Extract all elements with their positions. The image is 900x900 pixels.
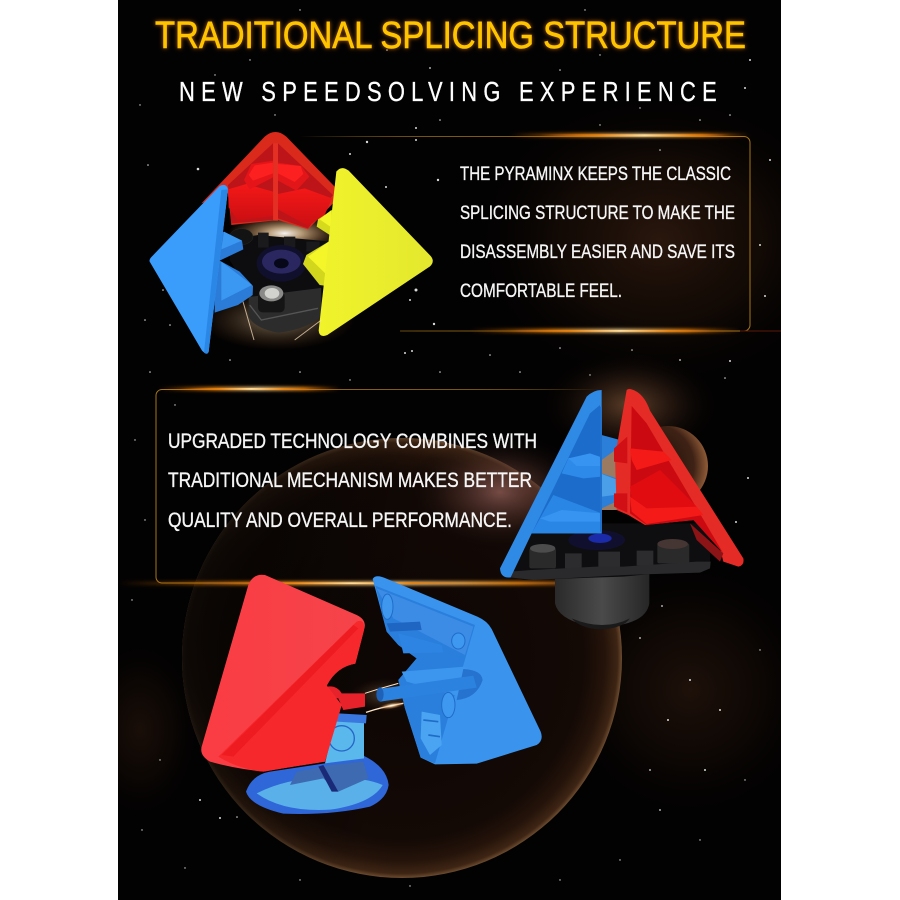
text block: lower description: QUALITY AND OVERALL PERFORMANCE. (168, 509, 512, 532)
red half piece (614, 389, 744, 567)
pyraminx cut-away view: right (500, 389, 744, 629)
red piece (201, 132, 335, 229)
large planet (182, 432, 622, 878)
light flares and rods (327, 678, 423, 712)
text block: top description: COMFORTABLE FEEL. (460, 280, 622, 302)
black base and cylinder (510, 523, 711, 629)
pyraminx corner exploded view: bottom (201, 575, 542, 814)
panel: top text frame (300, 134, 781, 332)
text block: top description: THE PYRAMINX KEEPS THE CLASSIC (460, 163, 731, 185)
light flares (243, 302, 321, 340)
glow behind core (201, 215, 355, 350)
panel: lower text frame (118, 387, 618, 585)
blue piece (149, 185, 253, 354)
transparent blue stem (325, 713, 367, 763)
text block: top description (460, 163, 735, 302)
stars (131, 9, 771, 887)
text block: lower description: UPGRADED TECHNOLOGY COMBINES WITH (168, 430, 537, 453)
blue cap (373, 576, 542, 764)
middle blue wedges (602, 435, 628, 510)
red cap (201, 575, 365, 772)
mechanism core (230, 229, 331, 333)
blue half piece (500, 390, 602, 577)
yellow piece (303, 168, 433, 336)
subtitle: NEW SPEEDSOLVING EXPERIENCE (179, 76, 723, 107)
pyraminx exploded view: top (149, 132, 433, 354)
title: TRADITIONAL SPLICING STRUCTURE (155, 15, 746, 57)
text block: top description: DISASSEMBLY EASIER AND SAVE ITS (460, 241, 735, 263)
text block: lower description (168, 430, 537, 532)
translucent blue base (246, 756, 389, 814)
text block: lower description: TRADITIONAL MECHANISM MAKES BETTER (168, 469, 532, 492)
text block: top description: SPLICING STRUCTURE TO MAKE THE (460, 202, 735, 224)
small planet (628, 426, 708, 506)
